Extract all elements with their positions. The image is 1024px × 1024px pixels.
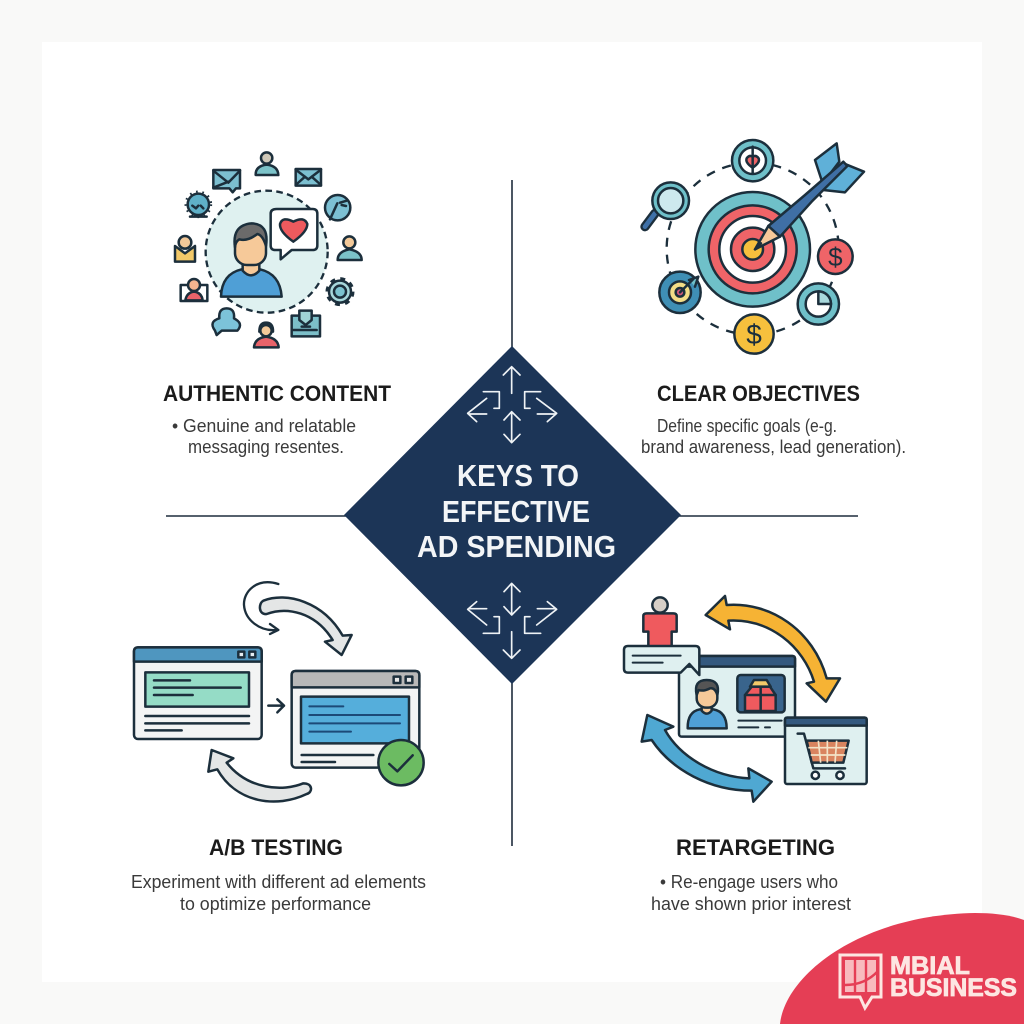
logo wordmark: MBIAL	[890, 952, 970, 980]
heading: authentic content: AUTHENTIC CONTENT	[163, 381, 392, 406]
icon: user, ad window, shopping cart and loop arrows	[624, 596, 867, 802]
icon: target with dart and orbiting icons: $	[828, 242, 843, 272]
text block: clear objectives description	[641, 416, 906, 457]
panel: clear objectives	[641, 140, 906, 457]
text block: a/b testing description: to optimize performance	[180, 894, 371, 914]
icon: top directional arrows	[468, 367, 557, 443]
logo wordmark: BUSINESS	[890, 974, 1017, 1002]
center title: KEYS TO	[457, 458, 579, 493]
text block: clear objectives description: brand awareness, lead generation).	[641, 437, 906, 457]
text block: clear objectives description: Define specific goals (e-g.	[657, 416, 837, 436]
logo badge: mbial business	[780, 913, 1024, 1024]
icon: two ad windows with cycle arrows and check badge	[134, 582, 424, 802]
heading: clear objectives: CLEAR OBJECTIVES	[657, 381, 860, 406]
center title	[417, 458, 616, 564]
logo wordmark	[890, 952, 1017, 1002]
icon: bottom directional arrows	[468, 583, 557, 658]
panel: authentic content	[163, 152, 392, 457]
text block: a/b testing description: Experiment with different ad elements	[131, 872, 426, 892]
text block: retargeting description	[651, 872, 851, 914]
icon: logo chart bubble	[840, 955, 881, 1008]
center title: EFFECTIVE	[442, 494, 590, 529]
center title: AD SPENDING	[417, 529, 616, 564]
text block: retargeting description: • Re-engage users who	[660, 872, 838, 892]
text block: a/b testing description	[131, 872, 426, 914]
panel: retargeting	[624, 596, 867, 914]
text block: retargeting description: have shown prior interest	[651, 894, 851, 914]
heading: a/b testing: A/B TESTING	[209, 835, 343, 860]
panel: a/b testing	[131, 582, 426, 914]
text block: authentic content description: • Genuine and relatable	[172, 416, 356, 436]
heading: retargeting: RETARGETING	[676, 835, 835, 860]
icon: target with dart and orbiting icons: $	[746, 319, 762, 350]
text block: authentic content description: messaging resentes.	[188, 437, 344, 457]
icon: target with dart and orbiting icons	[645, 140, 864, 354]
text block: authentic content description	[172, 416, 356, 457]
center diamond: keys to effective ad spending	[344, 346, 681, 684]
icon: person with heart message and surrounding icons	[175, 152, 362, 347]
